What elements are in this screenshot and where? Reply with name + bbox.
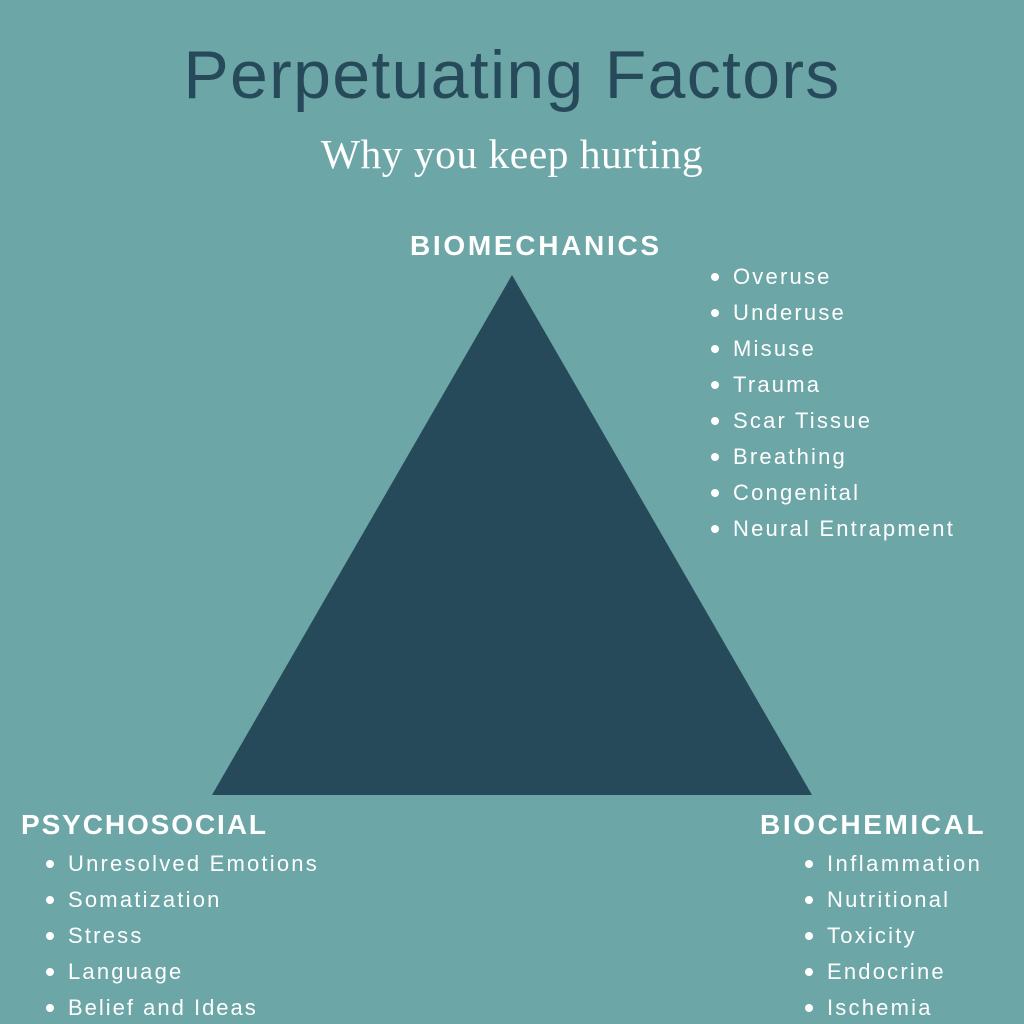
list: psychosocial: Stress (68, 923, 144, 948)
list: biomechanics: Underuse (733, 300, 846, 325)
list: psychosocial: Belief and Ideas (68, 995, 258, 1020)
list: biomechanics: Scar Tissue (733, 408, 872, 433)
list: biochemical: Inflammation (827, 851, 982, 876)
list: biochemical: Nutritional (827, 887, 950, 912)
heading: biomechanics: BIOMECHANICS (410, 230, 662, 261)
list: biomechanics: Overuse (733, 264, 832, 289)
list: psychosocial: Language (68, 959, 183, 984)
heading: psychosocial: PSYCHOSOCIAL (21, 809, 268, 840)
list: psychosocial (46, 851, 319, 1020)
list: biochemical: Toxicity (827, 923, 917, 948)
list: biomechanics: Neural Entrapment (733, 516, 955, 541)
list: biochemical: Ischemia (827, 995, 933, 1020)
title: Perpetuating Factors (183, 37, 841, 113)
list: biomechanics: Congenital (733, 480, 860, 505)
subtitle: Why you keep hurting (321, 131, 703, 177)
list: biomechanics: Misuse (733, 336, 816, 361)
list: biochemical (805, 851, 982, 1020)
list: biomechanics (711, 264, 955, 541)
heading: biochemical: BIOCHEMICAL (760, 809, 986, 840)
list: biomechanics: Trauma (733, 372, 821, 397)
list: psychosocial: Unresolved Emotions (68, 851, 319, 876)
list: biochemical: Endocrine (827, 959, 946, 984)
list: biomechanics: Breathing (733, 444, 847, 469)
list: psychosocial: Somatization (68, 887, 222, 912)
